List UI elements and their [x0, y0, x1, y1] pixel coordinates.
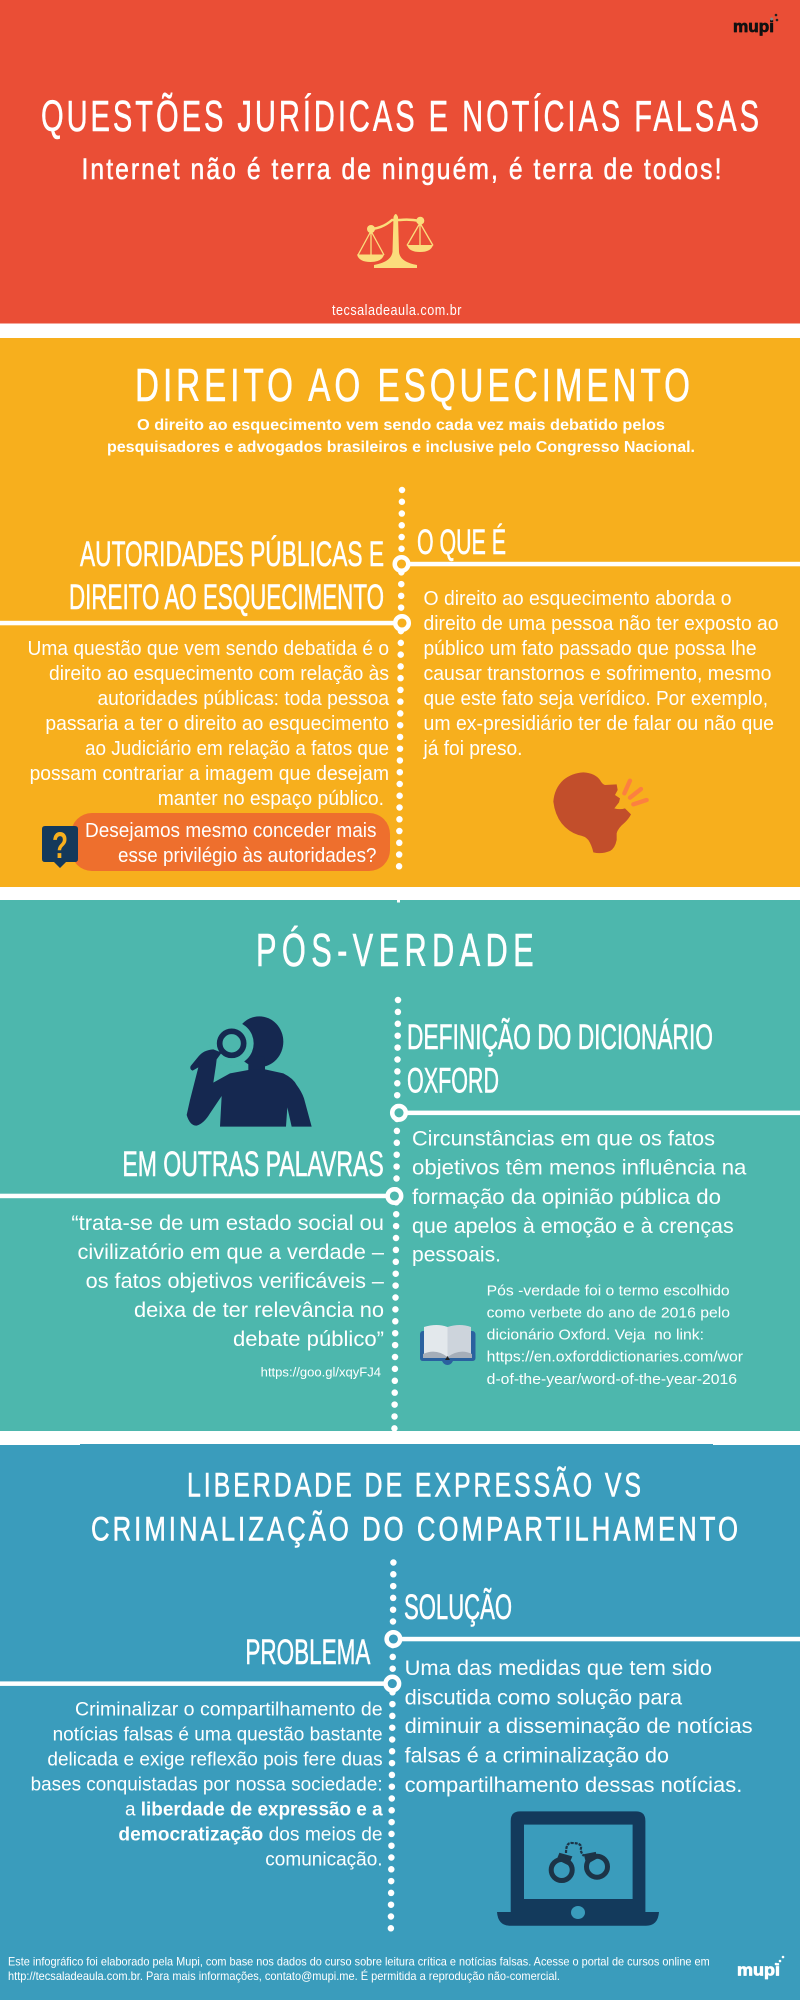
text: solução: falsas é a criminalização do	[405, 1744, 669, 1768]
timeline dots	[391, 1562, 393, 1939]
panel: liberdade de expressão	[0, 1444, 800, 2000]
small dot at panel edge	[397, 897, 400, 900]
text: autoridades: passaria a ter o direito ao esquecimento	[45, 713, 389, 735]
text: solução: discutida como solução para	[405, 1686, 682, 1709]
note: oxford: dicionário Oxford. Veja no link:	[487, 1327, 704, 1344]
logo: mupi white: mupi	[737, 1962, 780, 1980]
timeline dots	[394, 1000, 398, 1431]
text: quote: os fatos objetivos verificáveis –	[86, 1269, 384, 1293]
panel: direito ao esquecimento	[0, 338, 800, 900]
connector right	[387, 1632, 800, 1646]
text: definição: que apelos à emoção e à crenças	[412, 1214, 734, 1238]
text: autoridades: autoridades públicas: toda pessoa	[98, 688, 390, 710]
text: solução: compartilhamento dessas notícias.	[405, 1774, 742, 1797]
website: tecsaladeaula.com.br	[332, 302, 462, 319]
text: problema: bases conquistadas por nossa sociedade:	[31, 1774, 383, 1795]
text: autoridades	[28, 638, 390, 810]
text: problema: comunicação.	[265, 1849, 383, 1870]
panel: pós-verdade	[0, 900, 800, 1431]
text: o que é: causar transtornos e sofrimento, mesmo	[424, 663, 772, 685]
text: solução: diminuir a disseminação de notícias	[405, 1715, 753, 1738]
logo: mupi black: mupi	[733, 18, 774, 36]
note: oxford	[487, 1282, 743, 1388]
text: quote: deixa de ter relevância no	[134, 1298, 384, 1322]
heading: em outras palavras: EM OUTRAS PALAVRAS	[122, 1145, 384, 1184]
text: problema: Criminalizar o compartilhamento de	[75, 1699, 383, 1720]
text: definição: objetivos têm menos influência na	[412, 1156, 746, 1180]
text: definição	[412, 1126, 746, 1267]
note: oxford: d-of-the-year/word-of-the-year-2016	[487, 1371, 737, 1388]
heading: PÓS-VERDADE	[256, 924, 539, 976]
icon: scales of justice	[357, 214, 433, 268]
text: autoridades: Uma questão que vem sendo debatida é o	[28, 638, 389, 660]
text: o que é: direito de uma pessoa não ter exposto ao	[424, 613, 778, 635]
text: problema: notícias falsas é uma questão bastante	[53, 1724, 383, 1745]
text: definição: pessoais.	[412, 1243, 501, 1267]
heading: definição	[407, 1018, 713, 1100]
heading: LIBERDADE DE EXPRESSÃO VS	[187, 1466, 644, 1504]
footer text	[8, 1955, 710, 1983]
intro text: O direito ao esquecimento vem sendo cada vez mais debatido pelos	[137, 417, 665, 434]
intro text: pesquisadores e advogados brasileiros e inclusive pelo Congresso Nacional.	[107, 439, 695, 456]
connector right	[395, 557, 800, 571]
icon: laptop	[497, 1811, 659, 1926]
heading: autoridades públicas: DIREITO AO ESQUECIMENTO	[69, 578, 384, 617]
panel: header	[0, 0, 800, 324]
note: oxford: Pós -verdade foi o termo escolhido	[487, 1282, 730, 1300]
text: o que é: já foi preso.	[423, 738, 522, 760]
connector left	[0, 1189, 401, 1203]
source link: https://goo.gl/xqyFJ4	[261, 1364, 381, 1380]
icon: person with magnifying glass	[187, 1016, 312, 1127]
note: oxford: como verbete do ano de 2016 pelo	[487, 1305, 730, 1322]
note: oxford: https://en.oxforddictionaries.com/wor	[487, 1349, 743, 1366]
timeline dots	[399, 490, 402, 878]
icon: handcuffs	[551, 1843, 608, 1880]
text: definição: Circunstâncias em que os fatos	[412, 1126, 715, 1150]
callout: question: esse privilégio às autoridades?	[118, 845, 376, 867]
heading: autoridades públicas	[69, 535, 384, 617]
icon: speaking head	[553, 772, 647, 853]
text: solução	[405, 1657, 753, 1797]
text: autoridades: possam contrariar a imagem que desejam	[30, 763, 389, 785]
callout: question: Desejamos mesmo conceder mais	[85, 820, 376, 842]
heading	[91, 1466, 741, 1549]
text: autoridades: ao Judiciário em relação a fatos que	[85, 738, 389, 760]
footer text: Este infográfico foi elaborado pela Mupi, com base nos dados do curso sobre leitura crítica e notícias falsas. Acesse o portal de cursos online em	[8, 1955, 710, 1969]
text: o que é: que este fato seja verídico. Por exemplo,	[424, 688, 768, 710]
footer text: http://tecsaladeaula.com.br. Para mais informações, contato@mupi.me. É permitida a reprodução não-comercial.	[8, 1968, 560, 1983]
icon: question bubble	[42, 825, 78, 868]
text: problema: democratização dos meios de	[118, 1824, 383, 1845]
text: problema: a liberdade de expressão e a	[125, 1799, 383, 1820]
heading: autoridades públicas: AUTORIDADES PÚBLICAS E	[80, 535, 384, 574]
text: quote: “trata-se de um estado social ou	[71, 1211, 384, 1235]
text: autoridades: direito ao esquecimento com relação às	[49, 663, 389, 685]
intro text	[107, 417, 695, 456]
connector left	[0, 1677, 399, 1690]
connector right	[392, 1106, 800, 1120]
text: o que é: um ex-presidiário ter de falar ou não que	[424, 713, 774, 735]
text: solução: Uma das medidas que tem sido	[405, 1657, 712, 1680]
text: problema	[31, 1699, 383, 1870]
heading: o que é: O QUE É	[417, 523, 506, 562]
text: o que é: público um fato passado que possa lhe	[424, 638, 756, 660]
heading: problema: PROBLEMA	[245, 1633, 371, 1672]
text: o que é: O direito ao esquecimento aborda o	[424, 588, 732, 610]
text: o que é	[423, 588, 778, 760]
text: definição: formação da opinião pública do	[412, 1185, 721, 1209]
heading: solução: SOLUÇÃO	[404, 1588, 512, 1627]
text: quote: civilizatório em que a verdade –	[78, 1240, 384, 1264]
icon: book	[420, 1325, 476, 1365]
text: problema: delicada e exige reflexão pois fere duas	[47, 1749, 383, 1770]
text: quote: debate público”	[233, 1327, 384, 1351]
text: quote	[71, 1211, 384, 1351]
heading: definição: OXFORD	[407, 1061, 499, 1100]
text: autoridades: manter no espaço público.	[158, 788, 384, 810]
connector left	[0, 616, 409, 630]
callout: question	[71, 813, 390, 871]
logo: mupi white	[737, 1956, 784, 1980]
icon: question bubble: ?	[52, 825, 68, 866]
